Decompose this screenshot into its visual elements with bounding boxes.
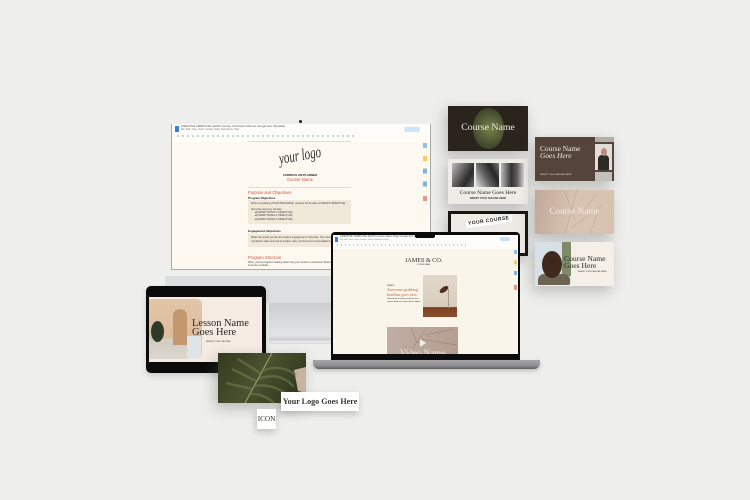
monitor screen bbox=[171, 124, 431, 270]
course name: Course Name bbox=[564, 254, 606, 263]
play icon bbox=[420, 339, 426, 347]
engagement text bbox=[251, 236, 348, 243]
brand tagline: COURSE NAME bbox=[417, 264, 430, 266]
logo label bbox=[281, 392, 359, 411]
side icons bbox=[514, 250, 517, 290]
card: beige branches course name bbox=[535, 190, 614, 234]
stacked cards column one bbox=[438, 104, 532, 267]
lesson title: Goes Here bbox=[192, 327, 236, 338]
hero text bbox=[387, 284, 420, 303]
bullet list: ■ [SMART RESULT OBJECTIVE] bbox=[255, 214, 292, 217]
bottom photo bbox=[595, 172, 612, 181]
hero body bbox=[387, 298, 420, 303]
side icons bbox=[423, 143, 427, 201]
face bbox=[542, 251, 562, 278]
structure text bbox=[248, 261, 355, 267]
hero body: Summarize the big result that your bbox=[387, 298, 419, 300]
course name: Course Name bbox=[540, 144, 580, 153]
branches bbox=[410, 327, 457, 354]
docs icon bbox=[335, 237, 338, 242]
foliage bbox=[562, 242, 571, 276]
ruler bbox=[248, 141, 351, 142]
course name: Course Name bbox=[287, 177, 313, 182]
monitor stand bbox=[269, 303, 331, 344]
card: portrait course name bbox=[535, 242, 614, 286]
hero body: course delivers to your ideal student bbox=[387, 301, 420, 303]
bullet list: ■ [SMART RESULT OBJECTIVE] bbox=[255, 218, 292, 221]
docs toolbar bbox=[333, 235, 518, 249]
logo label: Your Logo Goes Here bbox=[283, 397, 357, 406]
laptop base bbox=[313, 360, 540, 369]
subtitle: INSERT YOUR TAGLINE HERE bbox=[578, 271, 607, 273]
engagement text: completion rates and end-of-module stats, and brand recommendations, etc. bbox=[251, 240, 336, 243]
document title: CREATIVE TEMPLATE SHOP| Course Sales Page Google Doc Template bbox=[340, 235, 424, 238]
laptop notch bbox=[415, 232, 435, 238]
subtitle: INSERT YOUR TAGLINE HERE bbox=[470, 196, 506, 200]
brand name: JAMES & CO. bbox=[405, 257, 442, 264]
bullet list bbox=[251, 208, 292, 221]
menu bar: File Edit View Insert Format Tools Extensions Help bbox=[340, 239, 389, 241]
photo right bbox=[501, 163, 524, 187]
course name: Course Name Goes Here bbox=[460, 190, 516, 196]
card: dark leaf course name bbox=[448, 106, 528, 151]
jacket bbox=[538, 274, 570, 286]
desktop monitor bbox=[165, 120, 431, 344]
lesson subtitle: INSERT YOUR TAGLINE bbox=[206, 340, 231, 342]
course name: Goes Here bbox=[564, 261, 596, 270]
hero headline: Awesome-grabbing bbox=[387, 287, 418, 292]
hero photo bbox=[423, 275, 457, 317]
document title: CREATIVE TEMPLATE SHOP| Course Curriculum Planner Google Doc Template bbox=[181, 124, 285, 128]
hero headline: headline goes here bbox=[387, 292, 417, 297]
icon label bbox=[257, 409, 276, 429]
section heading: structure: Program Structure bbox=[248, 255, 281, 260]
structure text: When you're program breaking down how your course is structured. What elements are included. bbox=[248, 261, 355, 264]
arch bbox=[173, 309, 187, 345]
script logo: your logo bbox=[278, 143, 322, 169]
tablet bbox=[146, 286, 266, 373]
course name: Course Name bbox=[461, 122, 515, 133]
top photo bbox=[595, 137, 614, 142]
course name: Goes Here bbox=[540, 151, 572, 160]
tablet screen bbox=[149, 297, 262, 362]
docs icon bbox=[175, 126, 179, 132]
share button bbox=[500, 237, 510, 241]
leaf circle bbox=[473, 108, 504, 149]
vase bbox=[187, 336, 201, 360]
laptop screen bbox=[333, 235, 518, 354]
subtitle: INSERT YOUR TAGLINE HERE bbox=[540, 174, 571, 176]
card: brown course name bbox=[535, 137, 614, 181]
section heading: purpose: Purpose and Objectives bbox=[248, 190, 291, 195]
course name bbox=[564, 254, 606, 270]
flower stem bbox=[448, 289, 449, 308]
label: program objectives: Program Objectives bbox=[248, 196, 275, 200]
monitor chin bbox=[165, 276, 435, 303]
bullet list: ■ [SMART RESULT OBJECTIVE] bbox=[255, 211, 292, 214]
tool icons bbox=[177, 135, 357, 137]
portrait photo bbox=[595, 144, 612, 170]
stacked cards column two bbox=[524, 134, 618, 298]
photo left bbox=[452, 163, 474, 187]
lesson photo bbox=[149, 299, 202, 359]
hero headline bbox=[387, 287, 418, 297]
course name: Course Name bbox=[549, 206, 600, 216]
leaf drawing bbox=[226, 353, 306, 403]
lesson title: Lesson Name bbox=[192, 318, 249, 328]
head bbox=[601, 148, 607, 156]
card: photo trio course name bbox=[448, 159, 528, 204]
plant bbox=[151, 321, 164, 342]
card: your course bbox=[448, 211, 528, 256]
eyebrow: JAMES bbox=[387, 285, 394, 287]
leaf image card bbox=[218, 353, 306, 403]
engagement text: What role would you like the student engagement in this take. The course is scored with bbox=[251, 236, 348, 239]
branches bbox=[564, 190, 602, 234]
bullet list: Along the way they will also: bbox=[251, 208, 282, 211]
engagement panel bbox=[248, 234, 351, 247]
figure bbox=[598, 155, 609, 170]
course name bbox=[540, 144, 580, 160]
objectives text: When completing [YOUR PROGRAM], students will be able to [SMART OBJECTIVE]. bbox=[251, 202, 346, 205]
monitor camera bbox=[299, 120, 302, 123]
icon label: ICON bbox=[258, 415, 275, 423]
structure text: Insert the modules bbox=[248, 264, 269, 267]
planner heading: CURRICULUM PLANNER bbox=[283, 173, 317, 177]
video panel bbox=[387, 327, 458, 354]
lesson title bbox=[192, 318, 249, 338]
laptop lid bbox=[331, 232, 520, 361]
menu bar: File Edit View Insert Format Tools Extensions Help bbox=[181, 128, 239, 131]
share button bbox=[404, 127, 420, 132]
photo middle bbox=[476, 163, 499, 187]
docs toolbar bbox=[172, 124, 431, 142]
divider bbox=[248, 187, 351, 188]
label strip: YOUR COURSE bbox=[468, 215, 510, 227]
laptop bbox=[311, 232, 542, 373]
flower bbox=[438, 285, 450, 294]
tool icons bbox=[337, 244, 467, 246]
objectives panel bbox=[248, 200, 351, 224]
portrait photo bbox=[535, 242, 571, 285]
label: engagement objectives: Engagement Objectives bbox=[248, 229, 281, 233]
